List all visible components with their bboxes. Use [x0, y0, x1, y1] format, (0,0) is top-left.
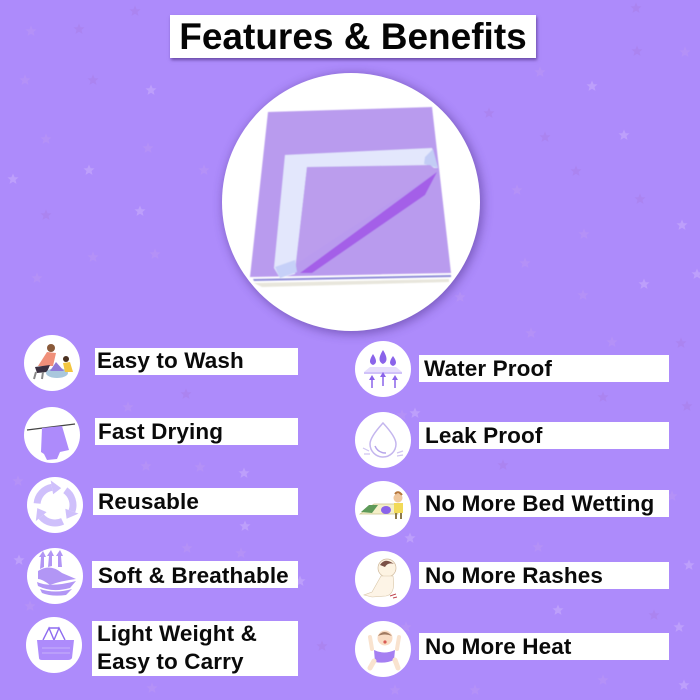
label: light weight and easy to carry: Light Weight &: [97, 621, 257, 646]
icon: garment on drying line: [24, 407, 80, 463]
label: reusable: [93, 488, 298, 515]
product image: folded mat in white circle: [218, 68, 488, 340]
label: leak proof: Leak Proof: [425, 423, 542, 448]
title: Features & Benefits: [179, 16, 527, 57]
label: easy to wash: Easy to Wash: [97, 348, 244, 373]
label: no more bed wetting: No More Bed Wetting: [425, 491, 654, 516]
icon: outlined water drop: [355, 412, 411, 468]
label: no more heat: No More Heat: [425, 634, 571, 659]
label: water proof: [419, 355, 669, 382]
label: leak proof: [419, 422, 669, 449]
label: no more heat: [419, 633, 669, 660]
label: no more rashes: [419, 562, 669, 589]
label: soft and breathable: Soft & Breathable: [98, 563, 289, 588]
label: light weight and easy to carry: Easy to Carry: [97, 649, 244, 674]
label: fast drying: [95, 418, 298, 445]
icon: recycle arrows: [27, 477, 83, 533]
icon: breathable layered fabric: [27, 548, 83, 604]
icon: baby in purple diaper: [355, 621, 411, 677]
icon: child beside wet bed: [355, 481, 411, 537]
label: no more rashes: No More Rashes: [425, 563, 603, 588]
icon: water drops above barrier with arrows: [355, 341, 411, 397]
label: reusable: Reusable: [98, 489, 199, 514]
icon: shopping basket: [26, 617, 82, 673]
label: easy to wash: [95, 348, 298, 375]
label: light weight and easy to carry: [92, 621, 298, 676]
panel: left feature labels: [92, 348, 298, 676]
label: fast drying: Fast Drying: [98, 419, 223, 444]
icon: sitting baby with rash: [355, 551, 411, 607]
panel: right feature labels: [419, 355, 669, 660]
label: water proof: Water Proof: [424, 356, 552, 381]
icon: mother and child washing: [24, 335, 80, 391]
